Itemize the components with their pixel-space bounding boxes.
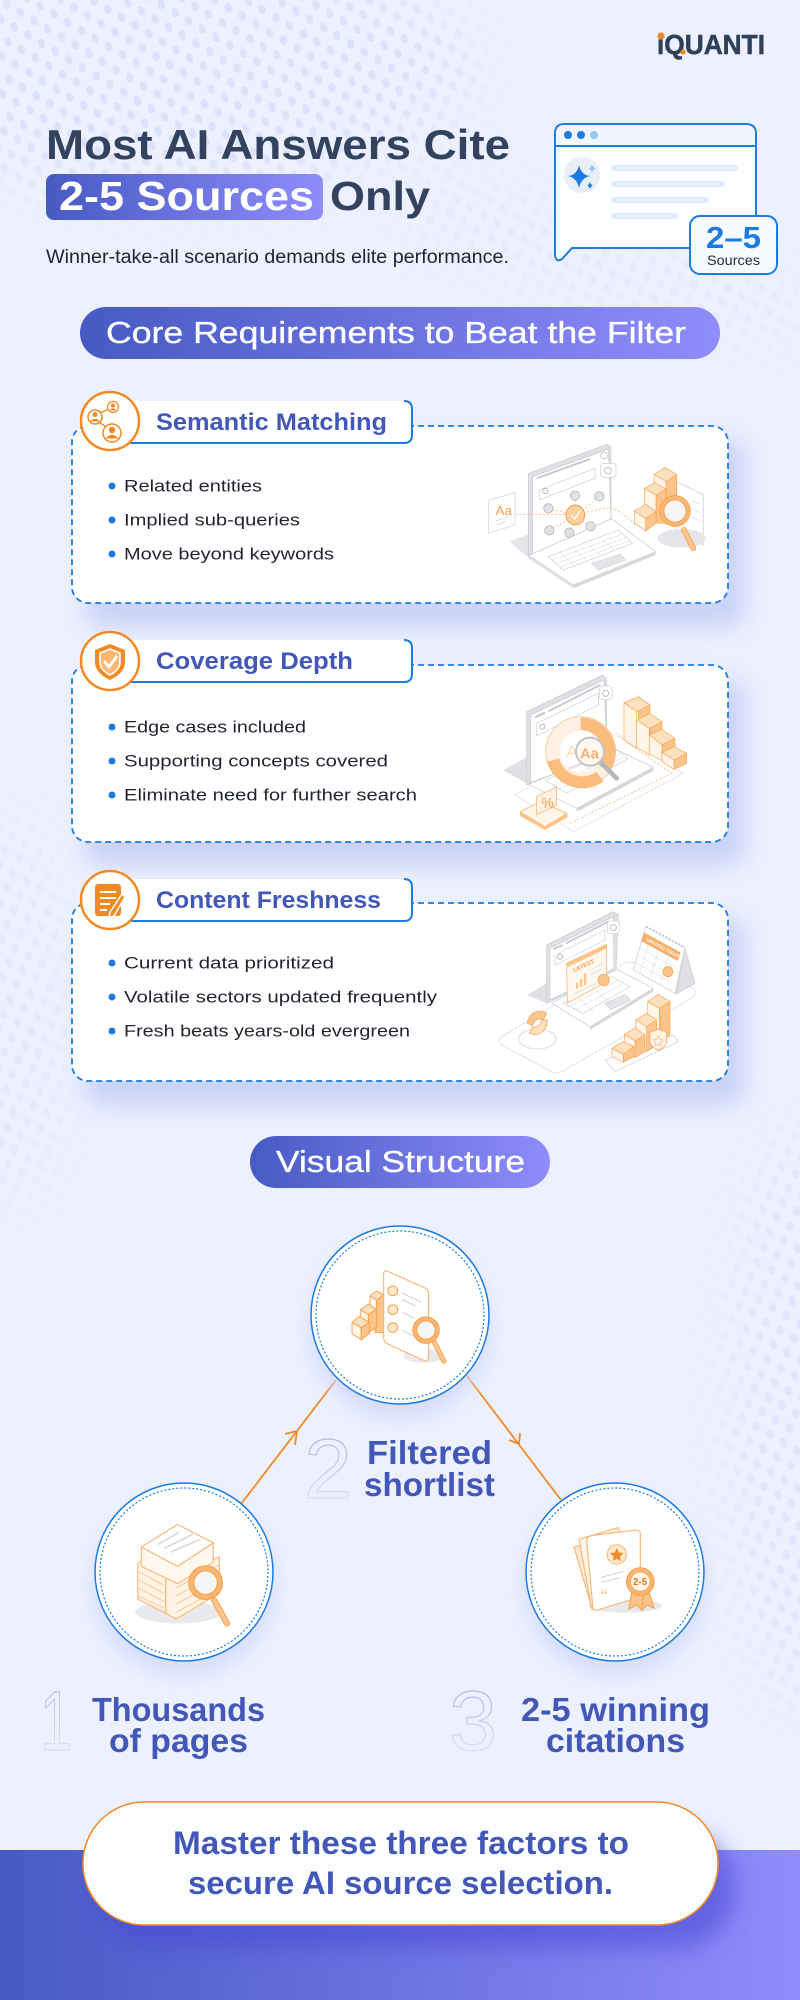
badge xyxy=(690,216,777,274)
callout: closing message xyxy=(83,1802,735,1948)
panel: coverage depth xyxy=(72,632,745,866)
logo: iQUANTI xyxy=(657,29,765,60)
icon: network of people xyxy=(81,392,139,450)
icon: certificates with rosette: “ xyxy=(600,1588,608,1605)
number 1: 1 xyxy=(40,1674,72,1768)
subtitle: Winner-take-all scenario demands elite performance. xyxy=(46,247,509,268)
heading pill: core requirements: Core Requirements to Beat the Filter xyxy=(106,315,686,350)
title: Only xyxy=(330,173,430,219)
illustration: laptop, calendar and rising bars: LATEST xyxy=(572,959,596,974)
illustration: laptop with donut and magnifier xyxy=(503,675,687,832)
heading pill: visual structure: Visual Structure xyxy=(276,1144,525,1179)
bullet list xyxy=(108,718,417,804)
illustration: laptop with semantic graph: Aa xyxy=(496,503,513,518)
bullet list: Supporting concepts covered xyxy=(124,752,388,770)
tab heading xyxy=(100,640,412,682)
illustration: laptop, calendar and rising bars xyxy=(499,912,695,1073)
step 3 label: citations xyxy=(546,1722,685,1759)
arrow: step 2 to step 3 xyxy=(467,1376,561,1500)
step 3: winning citations circle xyxy=(523,1483,707,1677)
step 1: thousands of pages circle xyxy=(92,1483,276,1677)
bullet list xyxy=(108,476,334,564)
callout: closing message: Master these three factors to xyxy=(173,1825,629,1861)
arrow: step 1 to step 2 xyxy=(241,1380,336,1504)
highlight: 2-5 Sources: 2-5 Sources xyxy=(59,173,314,219)
bullet list: Related entities xyxy=(124,476,262,496)
step 3 label: 2-5 winning xyxy=(521,1691,710,1728)
badge: Sources xyxy=(707,252,760,268)
heading pill: core requirements xyxy=(80,307,720,359)
bullet list: Volatile sectors updated frequently xyxy=(124,988,438,1006)
step 2: filtered shortlist circle xyxy=(308,1226,492,1420)
icon: document and pencil xyxy=(81,871,139,929)
bullet list xyxy=(108,954,438,1040)
tab heading xyxy=(100,879,412,921)
tab heading: Semantic Matching xyxy=(156,409,387,436)
illustration: laptop, calendar and rising bars: UPDATED TODAY xyxy=(646,937,680,959)
icon: shield check xyxy=(81,632,139,690)
illustration: laptop with donut and magnifier: A xyxy=(566,741,578,761)
illustration: laptop with donut and magnifier: % xyxy=(541,794,554,810)
step 2 label xyxy=(304,1422,495,1516)
bullet list: Implied sub-queries xyxy=(124,510,300,530)
step 1 label xyxy=(40,1674,265,1768)
step 2 label: Filtered xyxy=(367,1434,492,1471)
bullet list: Current data prioritized xyxy=(124,954,334,972)
panel: content freshness xyxy=(72,871,745,1106)
step 1 label: of pages xyxy=(109,1722,248,1759)
illustration: laptop with donut and magnifier: Aa xyxy=(580,746,600,762)
badge: 2–5 xyxy=(706,220,761,255)
icon: checklist with magnifier xyxy=(352,1271,444,1363)
bullet list: Move beyond keywords xyxy=(124,544,334,564)
icon: page stack with magnifier xyxy=(135,1524,227,1623)
icon: certificates with rosette: 2-5 xyxy=(633,1577,648,1588)
tab heading xyxy=(100,401,412,443)
step 3 label xyxy=(449,1674,710,1768)
step 1 label: Thousands xyxy=(92,1691,265,1728)
tab heading: Coverage Depth xyxy=(156,648,353,675)
title: Most AI Answers Cite xyxy=(46,121,510,168)
panel: semantic matching xyxy=(72,392,745,628)
title xyxy=(46,121,510,220)
step 2 label: shortlist xyxy=(364,1466,495,1503)
footer band xyxy=(0,1850,800,2000)
illustration: laptop with semantic graph xyxy=(488,444,706,588)
heading pill: visual structure xyxy=(250,1136,550,1188)
icon: chat window with 2-5 sources badge xyxy=(555,124,777,274)
bullet list: Edge cases included xyxy=(124,718,306,736)
number 2: 2 xyxy=(304,1422,352,1516)
callout: closing message: secure AI source selection. xyxy=(188,1865,613,1901)
bullet list: Eliminate need for further search xyxy=(124,786,417,804)
bullet list: Fresh beats years-old evergreen xyxy=(124,1022,410,1040)
icon: certificates with rosette xyxy=(574,1528,662,1613)
tab heading: Content Freshness xyxy=(156,887,381,914)
number 3: 3 xyxy=(449,1674,497,1768)
